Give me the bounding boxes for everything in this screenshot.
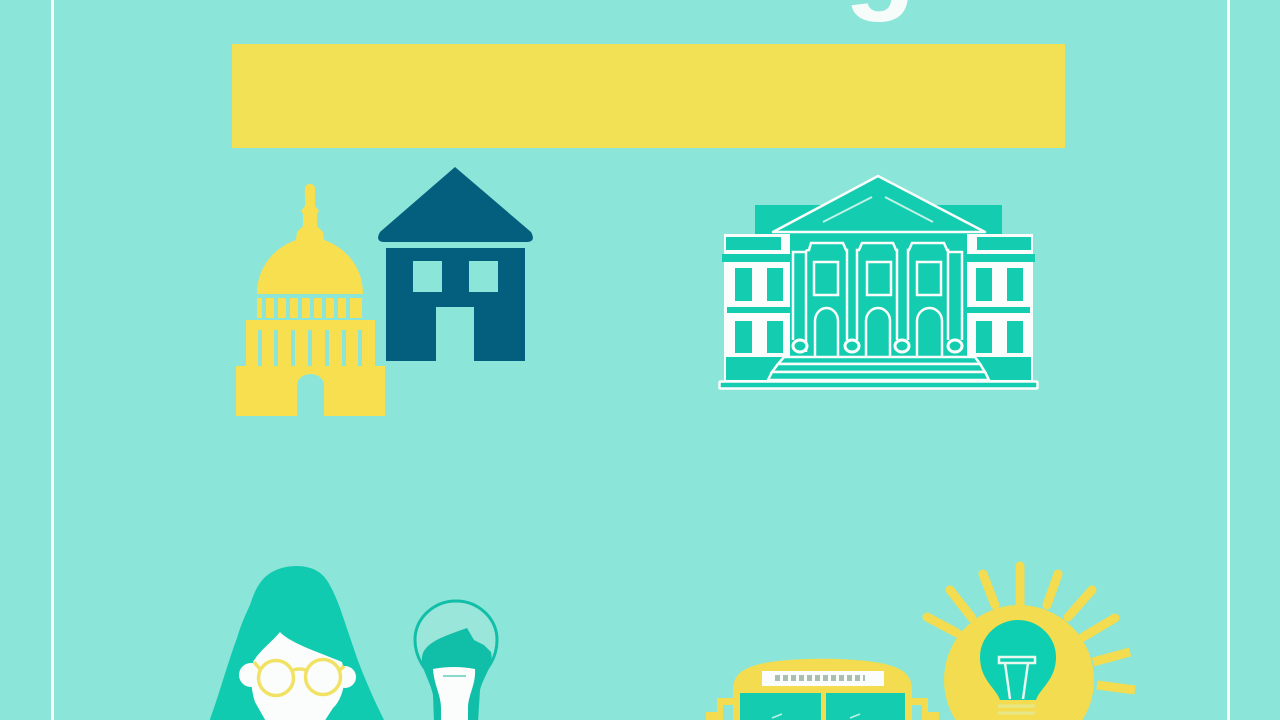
bulb outline	[415, 601, 497, 683]
yellow banner	[232, 44, 1065, 148]
icon: house	[378, 167, 533, 361]
hair	[209, 566, 385, 720]
bus body	[733, 659, 912, 720]
ears	[239, 663, 263, 687]
rear block	[755, 205, 1002, 237]
windscreens	[740, 693, 821, 720]
icon: glowing light bulb	[927, 566, 1135, 720]
front steps and base	[720, 357, 1038, 388]
face	[251, 632, 344, 720]
house roof	[378, 167, 533, 242]
icon: school bus	[706, 659, 939, 720]
icon: woman with glasses	[209, 566, 385, 720]
destination sign	[762, 671, 884, 686]
house body	[386, 248, 525, 361]
bulb base	[998, 706, 1035, 713]
glasses	[254, 660, 344, 696]
central portico	[790, 233, 967, 358]
pediment	[773, 176, 985, 232]
icon: capitol building	[236, 184, 385, 416]
rays	[927, 566, 1135, 690]
side wings	[724, 234, 1033, 382]
mirrors	[706, 698, 939, 720]
bulb fill shape	[422, 628, 492, 720]
bulb glass	[980, 620, 1056, 700]
icon: museum building	[720, 176, 1038, 388]
glow disc	[944, 605, 1094, 720]
bulb neck	[433, 667, 475, 720]
icon: head in light bulb	[415, 601, 497, 720]
filament	[999, 657, 1035, 699]
